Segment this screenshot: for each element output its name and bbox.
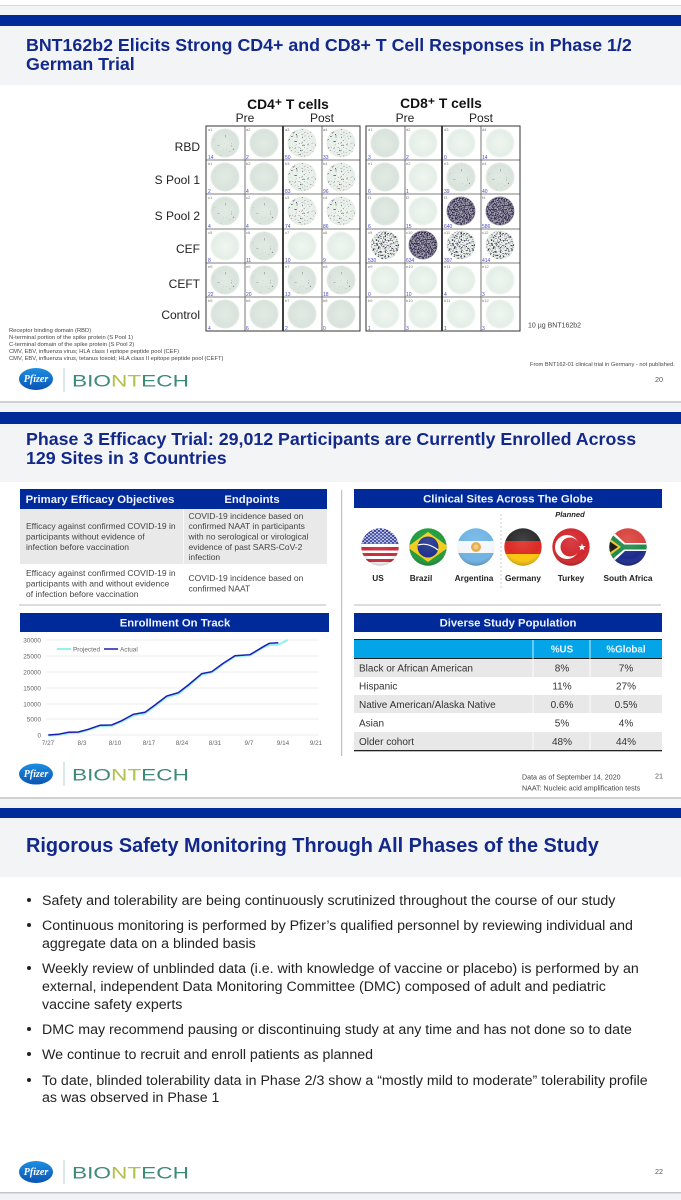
- logo: Pfizer BioNTech: [19, 1160, 189, 1184]
- bullet list: Weekly review of unblinded data (i.e. with knowledge of vaccine or placebo) is performed by an: [42, 961, 639, 977]
- CD8 ELISpot well grid: 4: [444, 292, 447, 298]
- CD4 ELISpot well grid: 4: [246, 224, 249, 230]
- CD8 ELISpot well grid: e11: [444, 264, 451, 269]
- panel: slide 20 T cell responses: [0, 5, 681, 392]
- abbreviations legend: N-terminal portion of the spike protein (S Pool 1): [9, 335, 133, 341]
- slide 20 title: [26, 35, 632, 74]
- slide 21 title band: [0, 424, 681, 482]
- line chart: [23, 638, 323, 747]
- CD8 ELISpot well grid: e12: [482, 264, 489, 269]
- panel: diverse study population table: %US: [551, 644, 574, 656]
- CD8 ELISpot well grid: 15: [406, 224, 412, 230]
- panel: objectives and endpoints table: evidence of past SARS-CoV-2: [188, 542, 303, 552]
- CD8 ELISpot well grid: e4: [482, 161, 487, 166]
- panel: objectives and endpoints table: Efficacy against confirmed COVID-19 in: [26, 521, 176, 531]
- icon: US flag: [361, 528, 399, 566]
- CD4 ELISpot well grid: e7: [285, 264, 290, 269]
- row labels: S Pool 2: [155, 209, 200, 223]
- CD4 ELISpot well grid: 74: [285, 224, 291, 230]
- page number 22: 22: [655, 1167, 663, 1176]
- data notes: Data as of September 14, 2020: [522, 774, 621, 782]
- CD8 ELISpot well grid: e9: [368, 264, 373, 269]
- panel: objectives and endpoints table: [19, 489, 327, 606]
- line chart: 10000: [23, 702, 41, 708]
- line chart: 30000: [23, 638, 41, 644]
- CD4 ELISpot well grid: c1: [208, 195, 213, 200]
- CD8 ELISpot well grid: 40: [482, 189, 488, 195]
- CD4 ELISpot well grid: b1: [208, 161, 213, 166]
- CD8 ELISpot well grid: e3: [444, 161, 449, 166]
- CD4 ELISpot well grid: [206, 126, 360, 332]
- vertical divider: [341, 490, 342, 756]
- line chart: 9/7: [245, 740, 254, 747]
- column headings: Pre: [396, 111, 415, 125]
- CD8 ELISpot well grid: 3: [368, 155, 371, 161]
- CD8 ELISpot well grid: b11: [444, 298, 451, 303]
- CD4 ELISpot well grid: c3: [285, 195, 290, 200]
- slide 22 title: Rigorous Safety Monitoring Through All Phases of the Study: [26, 835, 599, 857]
- panel: enrollment chart: [20, 613, 329, 747]
- CD8 ELISpot well grid: 397: [444, 258, 453, 264]
- line chart: 8/24: [176, 740, 189, 747]
- slide 22 title band: [0, 818, 681, 877]
- CD8 ELISpot well grid: f4: [482, 195, 486, 200]
- bullet list: as was observed in Phase 1: [42, 1090, 220, 1106]
- slide 22 blue band: [0, 808, 681, 818]
- panel: diverse study population table: Hispanic: [359, 682, 397, 692]
- CD8 ELISpot well grid: 586: [482, 224, 491, 230]
- CD8 ELISpot well grid: 3: [482, 326, 485, 332]
- line chart: 9/14: [277, 740, 290, 747]
- panel: clinical sites flags: Clinical Sites Across The Globe: [423, 494, 593, 506]
- logo: Pfizer BioNTech: Pfizer: [24, 1167, 48, 1178]
- flag labels: Germany: [505, 573, 541, 583]
- column headings: CD8⁺ T cells: [400, 96, 482, 111]
- CD4 ELISpot well grid: c5: [208, 230, 213, 235]
- abbreviations legend: C-terminal domain of the spike protein (S Pool 2): [9, 342, 134, 348]
- line chart: 5000: [27, 716, 41, 724]
- panel: diverse study population table: Older cohort: [359, 737, 414, 748]
- logo: Pfizer BioNTech: BIO NT ECH: [72, 371, 189, 390]
- CD8 ELISpot well grid: d2: [406, 127, 411, 132]
- row labels: Control: [161, 308, 200, 322]
- CD4 ELISpot well grid: b8: [323, 298, 328, 303]
- icon: Germany flag: [504, 528, 542, 566]
- abbreviations legend: CMV, EBV, influenza virus; HLA class I epitope peptide pool (CEF): [9, 349, 179, 355]
- column headings: Post: [310, 111, 335, 125]
- logo: Pfizer BioNTech: [19, 762, 189, 786]
- CD4 ELISpot well grid: c7: [285, 230, 290, 235]
- CD4 ELISpot well grid: e5: [208, 264, 213, 269]
- CD4 ELISpot well grid: 96: [323, 189, 329, 195]
- CD4 ELISpot well grid: e6: [246, 264, 251, 269]
- CD4 ELISpot well grid: 20: [246, 292, 252, 298]
- panel: diverse study population table: Native American/Alaska Native: [359, 700, 496, 711]
- CD8 ELISpot well grid: 6: [368, 224, 371, 230]
- panel: objectives and endpoints table: confirmed NAAT in participants: [188, 521, 305, 531]
- line chart: 20000: [23, 670, 41, 676]
- slide 20 title: BNT162b2 Elicits Strong CD4+ and CD8+ T Cell Responses in Phase 1/2: [26, 35, 632, 55]
- bullet list: [27, 893, 648, 1106]
- CD8 ELISpot well grid: 0: [368, 292, 371, 298]
- line chart: 8/3: [78, 740, 87, 747]
- panel: diverse study population table: 7%: [619, 664, 633, 674]
- CD4 ELISpot well grid: c4: [323, 195, 328, 200]
- CD8 ELISpot well grid: b12: [482, 298, 489, 303]
- row labels: [155, 140, 201, 322]
- panel: objectives and endpoints table: COVID-19 incidence based on: [188, 511, 304, 521]
- CD8 ELISpot well grid: 0: [444, 155, 447, 161]
- logo: Pfizer BioNTech: Pfizer: [24, 769, 48, 780]
- panel: diverse study population table: Diverse Study Population: [440, 618, 577, 630]
- abbreviations legend: CMV, EBV, influenza virus, tetanus toxoid; HLA class II epitope peptide pool (CEFT): [9, 356, 224, 362]
- panel: objectives and endpoints table: COVID-19 incidence based on: [188, 573, 304, 583]
- flag labels: Turkey: [558, 573, 585, 583]
- panel: enrollment chart: Enrollment On Track: [120, 618, 231, 630]
- CD4 ELISpot well grid: 4: [246, 189, 249, 195]
- CD4 ELISpot well grid: 83: [285, 189, 291, 195]
- slide 20 blue band: [0, 15, 681, 26]
- CD8 ELISpot well grid: f3: [444, 195, 448, 200]
- chart legend: Projected: [73, 646, 100, 654]
- panel: clinical sites flags: [354, 489, 662, 606]
- panel: objectives and endpoints table: Endpoints: [224, 494, 280, 506]
- CD8 ELISpot well grid: c12: [482, 230, 489, 235]
- panel: objectives and endpoints table: with no serological or virological: [188, 532, 309, 542]
- panel: objectives and endpoints table: infection: [188, 552, 220, 562]
- data notes: NAAT: Nucleic acid amplification tests: [522, 784, 641, 792]
- panel: objectives and endpoints table: of infection before vaccination: [26, 589, 139, 599]
- column headings: [236, 96, 494, 125]
- CD4 ELISpot well grid: a2: [246, 127, 251, 132]
- logo: Pfizer BioNTech: [19, 368, 189, 392]
- CD4 ELISpot well grid: 22: [208, 292, 214, 298]
- CD4 ELISpot well grid: 8: [208, 258, 211, 264]
- CD4 ELISpot well grid: 4: [208, 224, 211, 230]
- row labels: RBD: [175, 140, 200, 154]
- bullet list: To date, blinded tolerability data in Phase 2/3 show a “mostly mild to moderate” tolerability profile: [42, 1073, 648, 1089]
- CD4 ELISpot well grid: 2: [285, 326, 288, 332]
- CD8 ELISpot well grid: f2: [406, 195, 410, 200]
- CD4 ELISpot well grid: c6: [246, 230, 251, 235]
- CD4 ELISpot well grid: b3: [285, 161, 290, 166]
- CD4 ELISpot well grid: c2: [246, 195, 251, 200]
- bottom edge: [0, 1192, 681, 1200]
- slide 20 title: German Trial: [26, 54, 135, 74]
- CD4 ELISpot well grid: e8: [323, 264, 328, 269]
- row labels: CEF: [176, 242, 200, 256]
- panel: diverse study population table: 0.6%: [551, 700, 574, 711]
- CD8 ELISpot well grid: 39: [444, 189, 450, 195]
- slide 21 title: Phase 3 Efficacy Trial: 29,012 Participants are Currently Enrolled Across: [26, 429, 636, 449]
- panel: objectives and endpoints table: confirmed NAAT: [188, 584, 250, 594]
- CD4 ELISpot well grid: b7: [285, 298, 290, 303]
- logo: Pfizer BioNTech: Pfizer: [24, 374, 48, 385]
- slide 21 title: [26, 429, 636, 468]
- CD4 ELISpot well grid: 33: [323, 155, 329, 161]
- CD4 ELISpot well grid: b4: [323, 161, 328, 166]
- panel: diverse study population table: 44%: [616, 737, 636, 748]
- bullet list: DMC may recommend pausing or discontinuing study at any time and has not done so to date: [42, 1022, 632, 1038]
- panel: diverse study population table: [354, 613, 662, 751]
- row labels: S Pool 1: [155, 173, 200, 187]
- CD8 ELISpot well grid: e1: [368, 161, 373, 166]
- CD4 ELISpot well grid: c8: [323, 230, 328, 235]
- abbreviations legend: Receptor binding domain (RBD): [9, 328, 91, 334]
- CD8 ELISpot well grid: 1: [406, 189, 409, 195]
- slide 21 blue band: [0, 412, 681, 424]
- panel: objectives and endpoints table: Primary Efficacy Objectives: [26, 494, 174, 506]
- CD4 ELISpot well grid: 18: [323, 292, 329, 298]
- CD4 ELISpot well grid: b2: [246, 161, 251, 166]
- CD8 ELISpot well grid: 14: [482, 155, 488, 161]
- panel: slide 21 efficacy trial: [0, 403, 681, 792]
- panel: diverse study population table: Black or African American: [359, 664, 473, 674]
- slide 21 title: 129 Sites in 3 Countries: [26, 448, 227, 468]
- bullet list: Safety and tolerability are being continuously scrutinized throughout the course of our study: [42, 893, 616, 909]
- CD4 ELISpot well grid: 86: [323, 224, 329, 230]
- chart legend: Actual: [120, 646, 138, 654]
- CD8 ELISpot well grid: [366, 126, 520, 332]
- panel: objectives and endpoints table: infection before vaccination: [26, 542, 129, 552]
- icon: Brazil flag: [407, 528, 449, 566]
- CD8 ELISpot well grid: 10: [406, 292, 412, 298]
- icon: South Africa flag: [609, 528, 647, 566]
- flag labels: US: [372, 573, 384, 583]
- flag labels: [372, 573, 653, 583]
- bullet list: aggregate data on a blinded basis: [42, 936, 256, 952]
- CD8 ELISpot well grid: 1: [368, 326, 371, 332]
- line chart: 8/17: [143, 740, 156, 747]
- CD8 ELISpot well grid: f1: [368, 195, 372, 200]
- slide 20 title band: [0, 26, 681, 85]
- CD8 ELISpot well grid: b9: [368, 298, 373, 303]
- line chart: 25000: [23, 654, 41, 660]
- panel: diverse study population table: 4%: [619, 718, 633, 730]
- slide separator: [0, 797, 681, 799]
- column headings: CD4⁺ T cells: [247, 97, 329, 112]
- bullet list: Continuous monitoring is performed by Pfizer’s qualified personnel by reviewing individual and: [42, 918, 633, 934]
- panel: diverse study population table: 27%: [616, 682, 636, 692]
- CD8 ELISpot well grid: 530: [368, 258, 377, 264]
- line chart: 8/10: [109, 740, 122, 747]
- CD8 ELISpot well grid: 640: [444, 224, 453, 230]
- CD4 ELISpot well grid: 10: [285, 258, 291, 264]
- line chart: 0: [37, 732, 41, 740]
- dose note: 10 µg BNT162b2: [528, 322, 581, 330]
- CD8 ELISpot well grid: 414: [482, 258, 491, 264]
- CD4 ELISpot well grid: 6: [246, 326, 249, 332]
- line chart: 15000: [23, 686, 41, 692]
- CD8 ELISpot well grid: 634: [406, 258, 415, 264]
- panel: slide 22 safety monitoring: [0, 799, 681, 1184]
- CD8 ELISpot well grid: 2: [406, 155, 409, 161]
- panel: diverse study population table: 0.5%: [615, 700, 638, 711]
- panel: diverse study population table: 8%: [555, 664, 569, 674]
- CD8 ELISpot well grid: d3: [444, 127, 449, 132]
- CD8 ELISpot well grid: d1: [368, 127, 373, 132]
- icon: Argentina flag: [457, 528, 495, 566]
- CD4 ELISpot well grid: 4: [208, 326, 211, 332]
- CD4 ELISpot well grid: b5: [208, 298, 213, 303]
- CD8 ELISpot well grid: 1: [444, 326, 447, 332]
- line chart: 7/27: [42, 740, 55, 747]
- CD8 ELISpot well grid: d4: [482, 127, 487, 132]
- CD4 ELISpot well grid: 11: [246, 258, 251, 264]
- bullet list: external, independent Data Monitoring Committee (DMC) composed of adult and pediatric: [42, 979, 606, 995]
- page number 21: 21: [655, 772, 663, 780]
- CD8 ELISpot well grid: e2: [406, 161, 411, 166]
- CD8 ELISpot well grid: 3: [406, 326, 409, 332]
- CD4 ELISpot well grid: a4: [323, 127, 328, 132]
- logo: Pfizer BioNTech: BIO NT ECH: [72, 765, 189, 784]
- CD8 ELISpot well grid: e10: [406, 264, 413, 269]
- abbreviations legend: [9, 328, 224, 362]
- panel: objectives and endpoints table: participants without evidence of: [26, 532, 145, 542]
- panel: diverse study population table: 11%: [552, 682, 572, 692]
- bullet list: vaccine safety experts: [42, 997, 182, 1013]
- flag labels: South Africa: [603, 573, 653, 583]
- flag labels: Brazil: [410, 573, 432, 583]
- panel: clinical sites flags: Planned: [555, 510, 585, 519]
- panel: objectives and endpoints table: Efficacy against confirmed COVID-19 in: [26, 568, 176, 578]
- line chart: 9/21: [310, 740, 323, 747]
- CD4 ELISpot well grid: 2: [208, 189, 211, 195]
- panel: diverse study population table: 5%: [555, 718, 569, 730]
- column headings: Post: [469, 111, 494, 125]
- row labels: CEFT: [169, 277, 201, 291]
- page number 20: 20: [655, 375, 663, 384]
- slide separator: [0, 401, 681, 403]
- logo: Pfizer BioNTech: BIO NT ECH: [72, 1163, 189, 1182]
- flag labels: Argentina: [455, 573, 494, 583]
- CD4 ELISpot well grid: 13: [285, 292, 291, 298]
- CD8 ELISpot well grid: 3: [482, 292, 485, 298]
- source note: From BNT162-01 clinical trial in Germany - not published.: [530, 362, 675, 368]
- panel: objectives and endpoints table: participants with and without evidence: [26, 578, 169, 588]
- CD8 ELISpot well grid: c10: [406, 230, 413, 235]
- CD4 ELISpot well grid: 0: [323, 326, 326, 332]
- CD8 ELISpot well grid: c9: [368, 230, 373, 235]
- CD4 ELISpot well grid: 9: [323, 258, 326, 264]
- column headings: Pre: [236, 111, 255, 125]
- CD4 ELISpot well grid: a1: [208, 127, 213, 132]
- CD4 ELISpot well grid: 14: [208, 155, 214, 161]
- CD8 ELISpot well grid: b10: [406, 298, 413, 303]
- CD4 ELISpot well grid: 2: [246, 155, 249, 161]
- CD4 ELISpot well grid: 50: [285, 155, 291, 161]
- data notes: [522, 774, 641, 792]
- panel: diverse study population table: %Global: [606, 644, 646, 656]
- CD4 ELISpot well grid: a3: [285, 127, 290, 132]
- panel: diverse study population table: 48%: [552, 737, 572, 748]
- line chart: 8/31: [209, 740, 222, 747]
- icon: Turkey flag: [552, 528, 590, 566]
- chart legend: [57, 646, 138, 654]
- panel: diverse study population table: Asian: [359, 718, 384, 730]
- bullet list: We continue to recruit and enroll patients as planned: [42, 1047, 373, 1063]
- CD8 ELISpot well grid: 6: [368, 189, 371, 195]
- CD4 ELISpot well grid: b6: [246, 298, 251, 303]
- CD8 ELISpot well grid: c11: [444, 230, 451, 235]
